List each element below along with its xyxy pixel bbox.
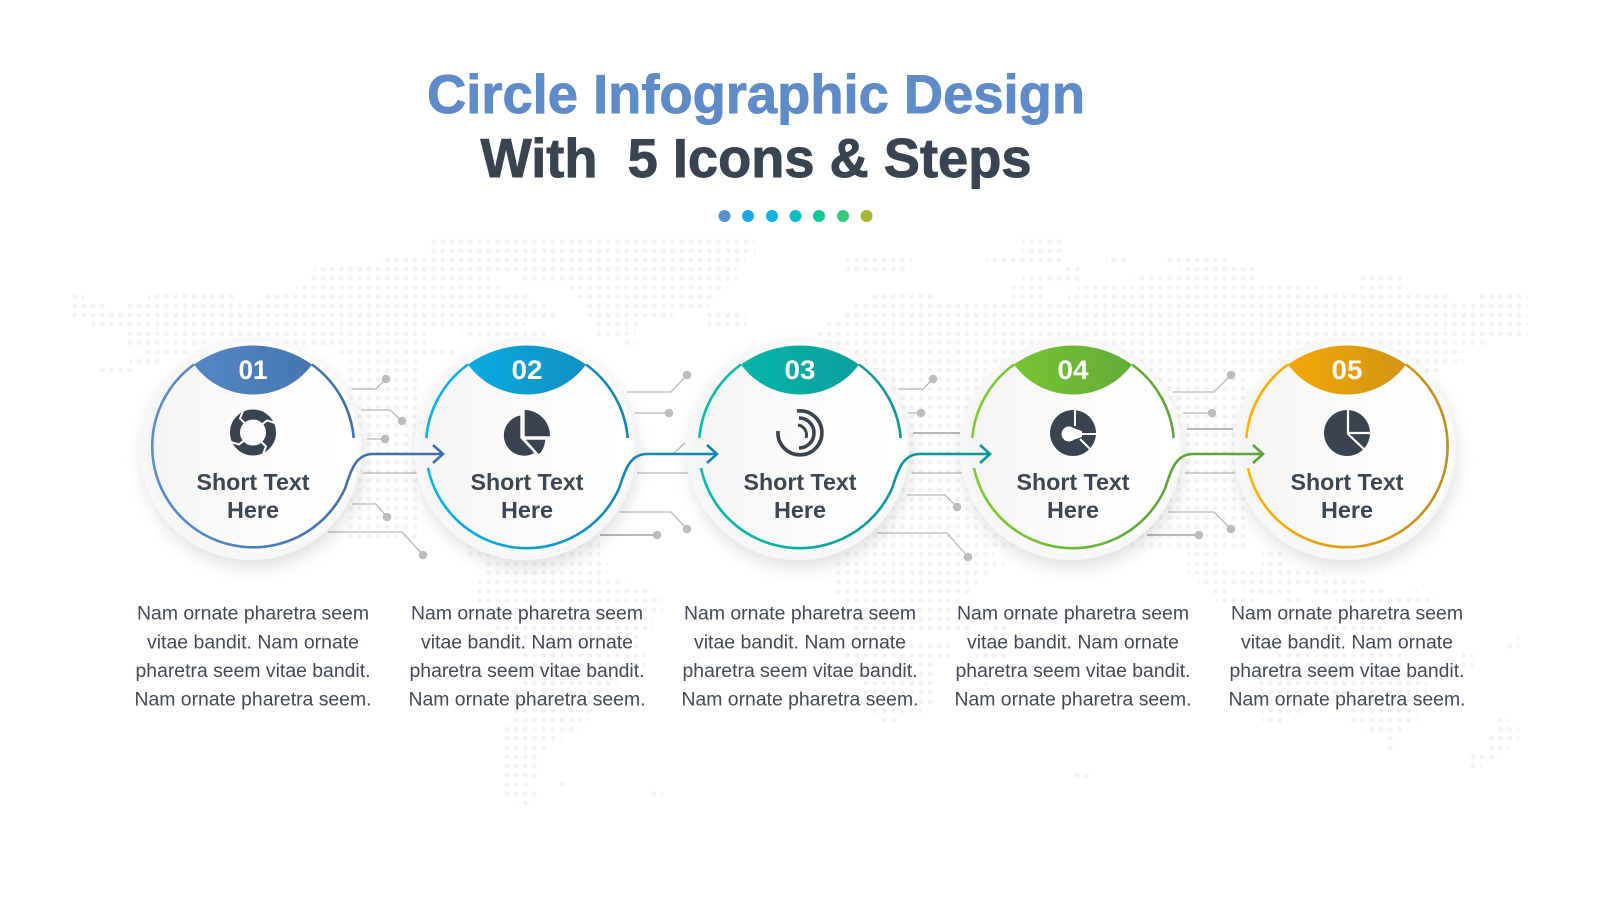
text block 04: vitae bandit. Nam ornate [967, 632, 1179, 654]
text block 01: Nam ornate pharetra seem. [134, 690, 372, 710]
text block 05: Nam ornate pharetra seem [1231, 604, 1463, 624]
arrow: 03 to 04 [701, 445, 990, 548]
panel: step 02: Here [501, 497, 553, 523]
icon: donut chart [1050, 409, 1097, 456]
panel: step 04: Here [1047, 497, 1099, 523]
background: dotted world map [71, 237, 1527, 807]
text block 02 [408, 604, 646, 710]
panel: step 03: Here [774, 497, 826, 523]
icon: spiral arcs [778, 411, 822, 455]
panel: step 05: 05 [1332, 355, 1362, 385]
text block 02: pharetra seem vitae bandit. [410, 661, 644, 682]
text block 04: Nam ornate pharetra seem. [954, 690, 1192, 710]
circuit connectors 04 to 05 [1147, 371, 1235, 539]
text block 04: Nam ornate pharetra seem [957, 604, 1189, 624]
title: With 5 Icons & Steps [480, 127, 1032, 189]
text block 05: Nam ornate pharetra seem. [1228, 690, 1466, 710]
text block 03: Nam ornate pharetra seem [684, 604, 916, 624]
arrow: 02 to 03 [428, 445, 717, 548]
text block 01: vitae bandit. Nam ornate [147, 632, 359, 654]
panel: step 01: Here [227, 497, 279, 523]
circuit connectors 02 to 03 [600, 371, 691, 539]
circuit connectors 03 to 04 [877, 375, 972, 561]
arrow: 04 to 05 [974, 445, 1263, 548]
title [427, 63, 1085, 189]
text block 03: Nam ornate pharetra seem. [681, 690, 919, 710]
icon: pie chart quarter [1324, 409, 1371, 456]
panel: step 05 [1234, 338, 1456, 560]
text block 02: Nam ornate pharetra seem [411, 604, 643, 624]
panel: step 01: Short Text [196, 469, 310, 495]
text block 03: pharetra seem vitae bandit. [682, 661, 918, 682]
text block 01 [134, 604, 372, 710]
text block 04: pharetra seem vitae bandit. [956, 661, 1190, 682]
text block 01: Nam ornate pharetra seem [137, 604, 369, 624]
text block 02: Nam ornate pharetra seem. [408, 690, 646, 710]
panel: step 04 [960, 338, 1263, 560]
panel: step 03 [687, 338, 990, 560]
panel: step 04: 04 [1058, 355, 1088, 385]
panel: step 01: 01 [238, 355, 268, 385]
text block 05 [1228, 604, 1466, 710]
text block 05: vitae bandit. Nam ornate [1241, 632, 1453, 654]
panel: step 02 [414, 338, 717, 560]
panel: step 05: Short Text [1290, 469, 1404, 495]
arrow: 01 to 02 [152, 364, 443, 547]
text block 02: vitae bandit. Nam ornate [421, 632, 633, 654]
panel: step 05: Here [1321, 497, 1373, 523]
title dots row [718, 210, 872, 222]
text block 03 [682, 604, 918, 710]
circuit connectors 01 to 02 [328, 375, 427, 559]
panel: step 03: 03 [785, 355, 815, 385]
icon: circular arrows ring [229, 408, 277, 456]
panel: step 04: Short Text [1016, 469, 1130, 495]
text block 04 [954, 604, 1192, 710]
title: Circle Infographic Design [427, 63, 1085, 125]
text block 03: vitae bandit. Nam ornate [694, 632, 906, 654]
panel: step 01 [140, 338, 443, 560]
text block 01: pharetra seem vitae bandit. [136, 661, 370, 682]
panel: step 02: Short Text [470, 469, 584, 495]
icon: exploded pie chart [504, 410, 550, 456]
panel: step 02: 02 [512, 355, 542, 385]
text block 05: pharetra seem vitae bandit. [1230, 661, 1464, 682]
panel: step 03: Short Text [744, 469, 857, 495]
